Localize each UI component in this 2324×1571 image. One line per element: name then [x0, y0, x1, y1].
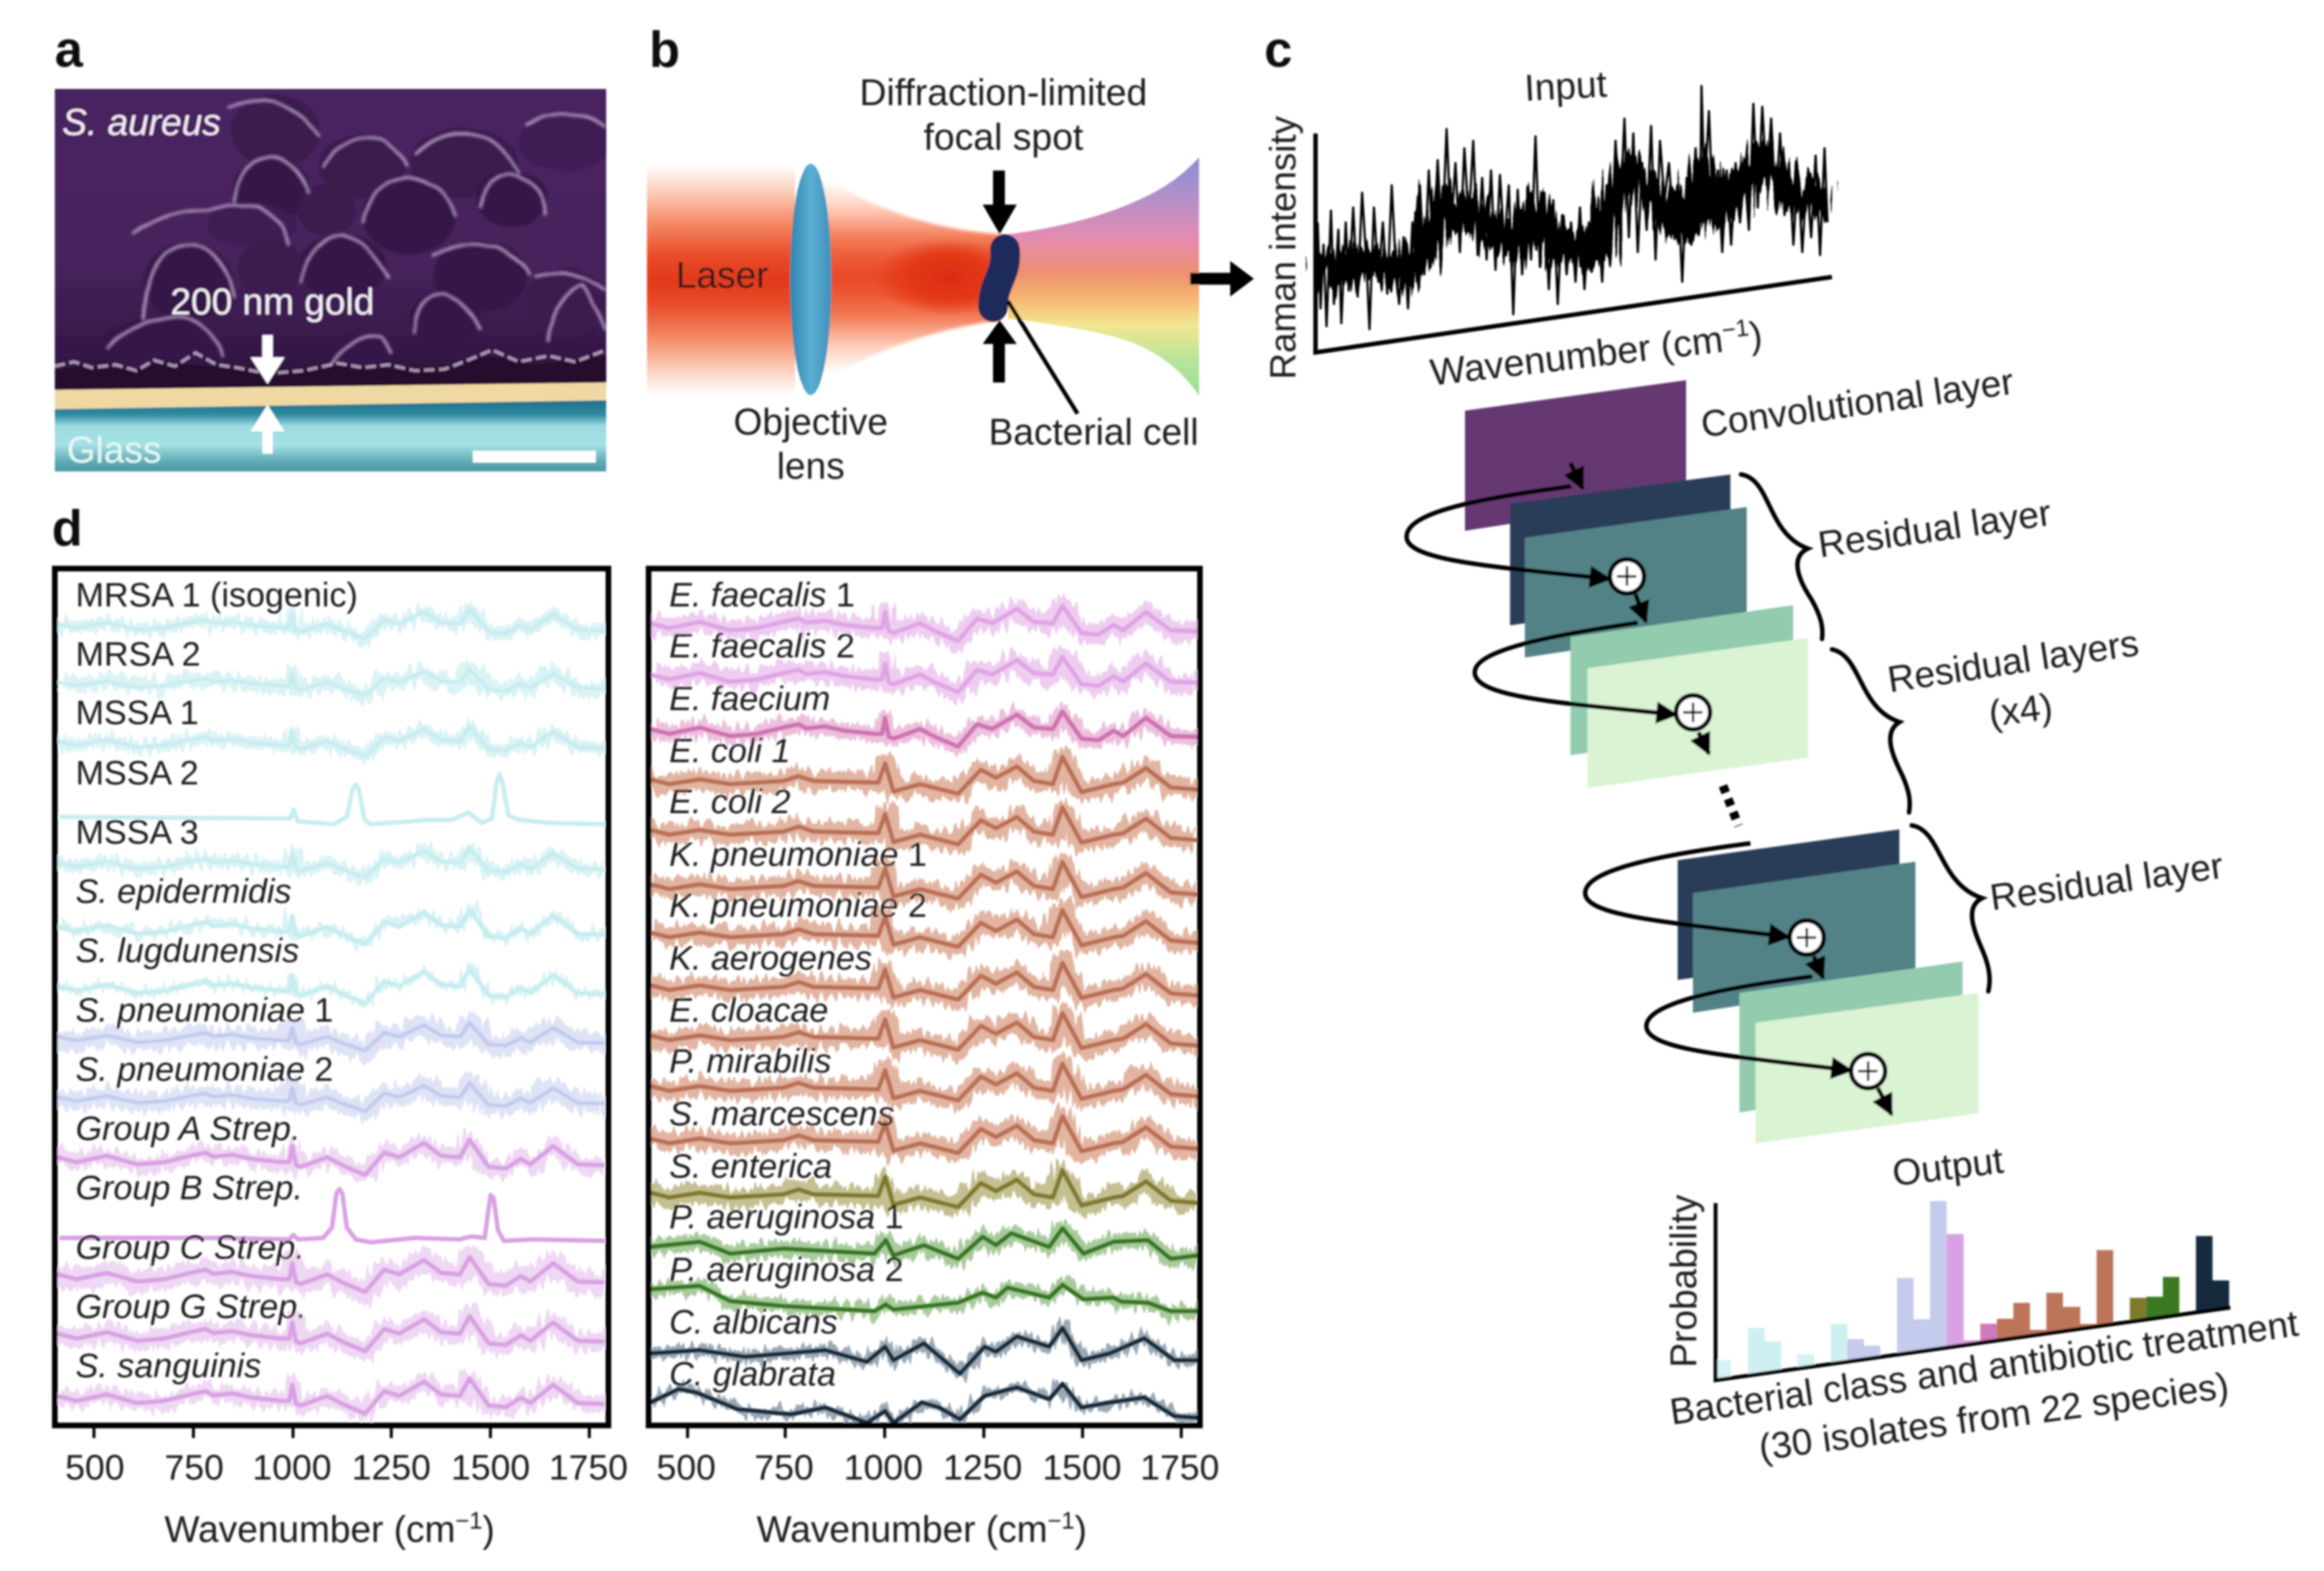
add nodes: [1610, 559, 1885, 1088]
left frame: [55, 568, 608, 1425]
panel d letter: d: [52, 500, 83, 556]
right species labels: C. albicans: [669, 1303, 838, 1341]
label: Residual layer 2: Residual layer: [1987, 844, 2226, 918]
left species labels: Group A Strep.: [75, 1110, 301, 1148]
right species labels: S. marcescens: [669, 1095, 895, 1133]
label: bacterial cell: Bacterial cell: [989, 411, 1198, 453]
right x axis: 1750: [1140, 1448, 1219, 1488]
label: objective lens: [733, 400, 888, 487]
left species labels: MSSA 3: [75, 813, 199, 851]
right species labels: E. cloacae: [669, 991, 828, 1029]
convolutional layer: [1465, 380, 1686, 531]
right species labels: E. faecalis 2: [669, 627, 855, 665]
left x axis: 500: [65, 1448, 125, 1488]
output chart axes: [1716, 1203, 2230, 1380]
focal arrow top: [983, 171, 1017, 234]
right species labels: [669, 576, 927, 1393]
panel a letter: a: [55, 21, 83, 78]
left x axis: 750: [164, 1448, 224, 1488]
leader line to bacterial cell: [1008, 301, 1078, 413]
right species labels: P. mirabilis: [669, 1043, 832, 1081]
label: class axis title: Bacterial class and antibiotic treatment: [1667, 1302, 2301, 1432]
label: Glass: Glass: [67, 429, 161, 471]
right x axis: 1500: [1043, 1448, 1121, 1488]
panel d left: spectra of staphylococci and streptococci: [55, 568, 628, 1549]
right x axis: ): [1075, 1508, 1087, 1549]
glass layer: [55, 400, 606, 472]
label: Residual layers x4: (x4): [1986, 685, 2055, 734]
right species labels: S. enterica: [669, 1148, 832, 1186]
left x axis: Wavenumber (cm: [164, 1508, 456, 1549]
left x axis: 1250: [352, 1448, 431, 1488]
left x axis: 1750: [549, 1448, 628, 1488]
converging beam: [800, 169, 1002, 388]
label: 200 nm gold: 200 nm gold: [171, 281, 375, 322]
left species labels: S. lugdunensis: [75, 932, 299, 970]
focal hot spot: [875, 239, 1022, 316]
dark base layer with jagged edge: [55, 356, 606, 396]
left species labels: S. epidermidis: [75, 873, 291, 911]
SEM background: [55, 89, 606, 385]
input signal core: [1319, 161, 1826, 271]
right x axis: 750: [754, 1448, 814, 1488]
label: S. aureus: S. aureus: [62, 101, 221, 143]
right noise bands: [650, 606, 1198, 1422]
label: Raman intensity: Raman intensity: [1262, 116, 1303, 380]
left species labels: Group C Strep.: [75, 1229, 305, 1267]
label: Wavenumber: Wavenumber (cm: [1428, 319, 1725, 394]
left species labels: [75, 576, 358, 1385]
label: Probability: Probability: [1662, 1194, 1704, 1368]
label: Residual layers x4: [1885, 622, 2141, 734]
arrow to panel c: [1190, 261, 1254, 296]
right x axis: [657, 1427, 1219, 1549]
residual block 4: [1739, 962, 1978, 1143]
bacterial cells: [105, 95, 613, 370]
panel d right: spectra of other species: [649, 568, 1219, 1549]
label: objective lens: Objective: [733, 400, 888, 442]
right species labels: K. pneumoniae 2: [669, 887, 927, 925]
left species labels: Group B Strep.: [75, 1169, 303, 1207]
right species labels: P. aeruginosa 2: [669, 1251, 903, 1289]
label: focal spot heading: Diffraction-limited: [860, 72, 1147, 114]
objective lens: [790, 164, 832, 395]
left x axis: ): [482, 1508, 495, 1549]
label: focal spot heading: [860, 72, 1147, 159]
right species labels: C. glabrata: [669, 1355, 836, 1393]
panel c letter: c: [1264, 21, 1292, 78]
gold layer: [55, 383, 606, 409]
right species labels: K. aerogenes: [669, 939, 872, 977]
output bars: [1714, 1201, 2229, 1380]
left x axis: −1: [456, 1508, 482, 1534]
left x axis: 1500: [451, 1448, 530, 1488]
ellipsis dots: [1723, 786, 1739, 826]
label: Output: Output: [1890, 1139, 2005, 1194]
left spectra traces: [57, 609, 605, 1414]
left x axis: [65, 1427, 628, 1549]
panel c: output chart: [1662, 1139, 2301, 1468]
left species labels: MRSA 2: [75, 636, 201, 674]
panel b: optical setup: [647, 72, 1254, 487]
right frame: [649, 568, 1200, 1425]
label: Convolutional layer: Convolutional layer: [1698, 360, 2016, 445]
panel c: input spectrum: [1262, 63, 1832, 394]
right x axis: 500: [657, 1448, 716, 1488]
right x axis: 1250: [943, 1448, 1022, 1488]
left species labels: S. sanguinis: [75, 1347, 261, 1385]
right species labels: E. faecium: [669, 680, 830, 718]
label: class axis title: (30 isolates from 22 species): [1756, 1364, 2231, 1468]
label: objective lens: lens: [777, 445, 845, 487]
braces: [1741, 474, 1990, 991]
residual block 2: [1571, 605, 1808, 788]
right mean lines: [650, 606, 1198, 1422]
label: Wavenumber: ): [1747, 314, 1764, 357]
left species labels: Group G Strep.: [75, 1288, 306, 1326]
right species labels: E. coli 1: [669, 732, 791, 770]
left x axis: 1000: [253, 1448, 331, 1488]
left species labels: S. pneumoniae 2: [75, 1051, 334, 1089]
left species labels: MRSA 1 (isogenic): [75, 576, 358, 614]
label: Residual layers x4: Residual layers: [1885, 622, 2141, 700]
residual block 3: [1678, 830, 1915, 1013]
input chart axes: [1316, 133, 1832, 352]
right x axis: 1000: [844, 1448, 923, 1488]
white arrows marking gold thickness: [250, 335, 285, 454]
scattered rainbow light: [1008, 157, 1199, 396]
left species labels: MSSA 1: [75, 694, 199, 732]
right species labels: E. faecalis 1: [669, 576, 855, 614]
left mean lines: [57, 609, 605, 1414]
scale bar: [473, 451, 596, 463]
label: focal spot heading: focal spot: [923, 117, 1083, 159]
left noise bands: [57, 609, 604, 1414]
bacterial cell: [993, 249, 1005, 307]
panel a: SEM image of S. aureus on gold: [55, 89, 613, 472]
laser beam before lens: [647, 164, 795, 396]
right x axis: −1: [1048, 1508, 1075, 1534]
label: Wavenumber: −1: [1721, 314, 1750, 344]
left species labels: S. pneumoniae 1: [75, 991, 334, 1029]
skip connection arrows: [1406, 463, 1891, 1115]
label: Input: Input: [1523, 63, 1608, 108]
panel b letter: b: [649, 21, 680, 78]
residual block 1: [1510, 474, 1746, 657]
right species labels: E. coli 2: [669, 783, 791, 821]
left species labels: MSSA 2: [75, 754, 199, 792]
right species labels: P. aeruginosa 1: [669, 1198, 903, 1236]
input signal spikes: [1317, 86, 1827, 329]
right x axis: Wavenumber (cm: [757, 1508, 1048, 1549]
label: Laser: Laser: [676, 254, 768, 296]
panel c: residual network: [1406, 360, 2226, 1143]
focal arrow bottom: [983, 320, 1017, 383]
right species labels: K. pneumoniae 1: [669, 835, 927, 873]
label: Residual layer 1: Residual layer: [1815, 492, 2054, 566]
